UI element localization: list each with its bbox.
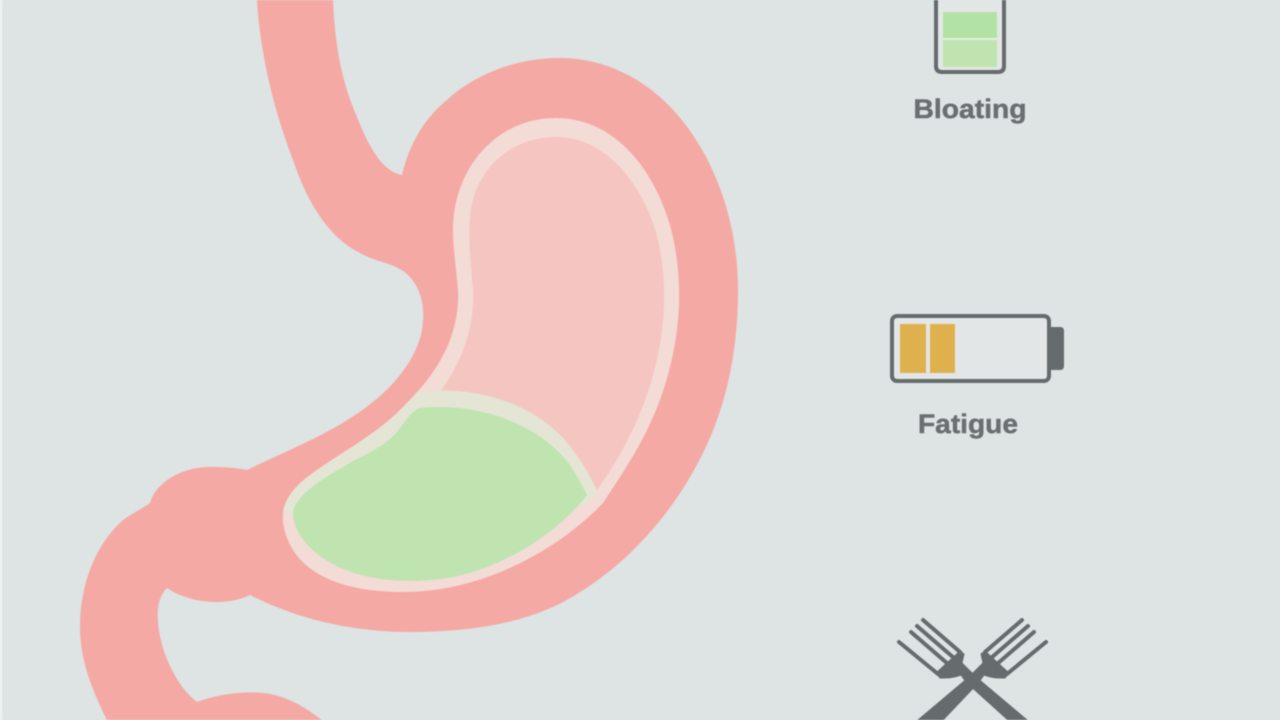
inner stomach lining <box>283 118 679 592</box>
icon: upright battery <box>936 0 1004 72</box>
stomach and intestine outer wall <box>80 0 738 720</box>
label: Bloating: Bloating <box>914 94 1026 124</box>
label: Fatigue: Fatigue <box>918 409 1018 439</box>
icon: crossed forks <box>899 620 1046 720</box>
icon: low battery <box>892 316 1064 381</box>
symptom: fatigue <box>892 316 1064 439</box>
fork pointing upper-right <box>918 620 1046 720</box>
fork pointing upper-left <box>899 620 1027 720</box>
stomach acid pool <box>293 407 587 581</box>
stomach illustration <box>80 0 738 720</box>
symptom: bloating <box>914 0 1026 124</box>
pale band around acid <box>283 390 598 540</box>
inner stomach cavity <box>440 137 664 490</box>
